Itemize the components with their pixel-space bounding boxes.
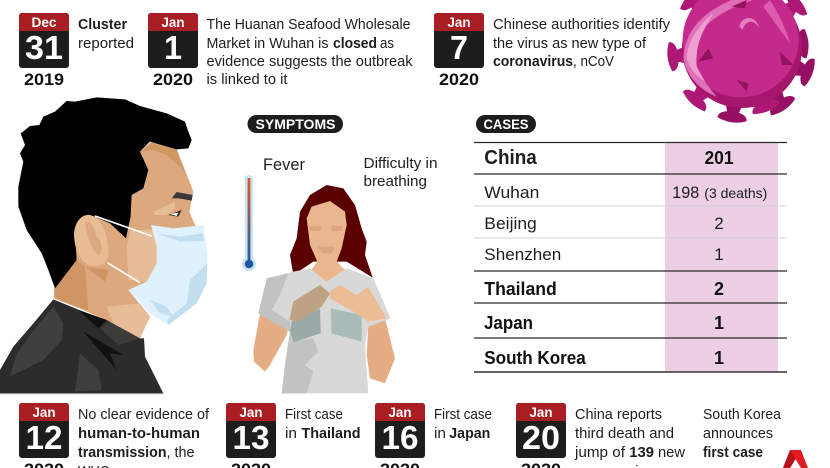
date: Jan 20 2020: 20	[522, 419, 560, 456]
text: first case Japan: in	[434, 426, 446, 442]
date: Jan 20 2020: Jan	[530, 404, 552, 420]
row: South Korea: South Korea	[484, 348, 587, 368]
text: first case Japan: Japan	[449, 426, 490, 442]
text: China third death	[574, 407, 688, 468]
row: Wuhan: 198	[672, 183, 699, 202]
text: cluster reported: Cluster	[78, 17, 127, 33]
text: first case Thailand: in	[285, 426, 297, 442]
text: virus identified: coronavirus	[493, 54, 573, 70]
row: Shenzhen	[484, 245, 724, 264]
text: no clear evidence: No clear evidence of	[78, 407, 210, 423]
date: Jan 1 2020: Jan	[162, 14, 184, 30]
text: South Korea first case: South Korea	[703, 407, 782, 423]
text: first case Japan	[434, 407, 492, 442]
label: difficulty in breathing: Difficulty in	[364, 156, 438, 172]
row: Beijing: Beijing	[484, 214, 537, 233]
row: South Korea	[484, 348, 724, 368]
text: China third death: 139	[629, 445, 654, 461]
date: Jan 20 2020	[516, 403, 566, 468]
row: Thailand: Thailand	[484, 279, 557, 299]
logo: red triangle	[783, 450, 808, 468]
text: market closed: Market in Wuhan is	[206, 36, 328, 52]
text: China third death: third death and	[575, 426, 674, 442]
text: no clear evidence: transmission	[78, 445, 166, 461]
row: China: 201	[704, 148, 734, 168]
cases heading: CASES	[484, 116, 528, 132]
text: no clear evidence: , the	[166, 445, 194, 461]
label: difficulty in breathing: breathing	[364, 174, 427, 190]
virus illustration	[666, 0, 817, 124]
text: market closed: as	[380, 36, 394, 52]
illustration: man wearing mask	[0, 97, 207, 394]
text: virus identified: , nCoV	[573, 54, 614, 70]
date: Jan 13 2020	[226, 403, 276, 468]
text: China third death: China reports	[575, 407, 662, 423]
date: Jan 7 2020: 2020	[439, 70, 479, 89]
text: market closed: closed	[333, 36, 377, 52]
date: Jan 13 2020: 13	[232, 419, 270, 456]
row: China: China	[484, 147, 538, 169]
text: market closed: is linked to it	[206, 72, 288, 88]
label: difficulty in breathing	[364, 156, 438, 190]
text: first case Thailand: Thailand	[302, 426, 360, 442]
row: Thailand	[484, 279, 724, 299]
text: no clear evidence: human-to-human	[78, 426, 200, 442]
symptoms heading: SYMPTOMS	[256, 116, 336, 132]
date: Jan 1 2020	[148, 13, 198, 89]
row: Japan	[484, 313, 724, 333]
row: Wuhan: Wuhan	[484, 183, 539, 202]
date: Jan 12 2020: Jan	[32, 404, 56, 420]
text: China third death: jump of	[574, 445, 626, 461]
text: first case Thailand: First case	[285, 407, 343, 423]
date: Dec 31 2019: 2019	[24, 70, 64, 89]
date: Dec 31 2019	[19, 13, 69, 89]
row: Shenzhen: Shenzhen	[484, 245, 561, 264]
row: Wuhan: (3 deaths)	[704, 185, 767, 201]
date: Jan 1 2020: 1	[164, 29, 182, 66]
text: no clear evidence	[78, 407, 210, 468]
date: Jan 12 2020: 12	[26, 419, 62, 456]
date: Jan 7 2020	[434, 13, 484, 89]
row: Thailand: 2	[714, 279, 724, 299]
text: first case Japan: First case	[434, 407, 492, 423]
date: Jan 1 2020: 2020	[153, 70, 193, 89]
date: Jan 16 2020	[375, 403, 425, 468]
text: South Korea first case: announces	[703, 426, 773, 442]
row: Beijing	[484, 214, 724, 233]
row: Beijing: 2	[714, 214, 724, 233]
illustration: woman with lungs	[253, 185, 395, 393]
text: cluster reported	[78, 17, 134, 52]
label: fever: Fever	[263, 155, 305, 174]
text: market closed: evidence suggests the outbreak	[206, 54, 413, 70]
text: virus identified	[493, 17, 671, 70]
row: South Korea: 1	[714, 348, 724, 368]
date: Jan 7 2020: Jan	[448, 14, 470, 30]
text: market closed	[206, 17, 413, 88]
icon: thermometer	[242, 175, 256, 271]
date: Jan 16 2020: 16	[382, 419, 418, 456]
date: Jan 12 2020	[19, 403, 69, 468]
row: Shenzhen: 1	[714, 245, 724, 264]
row: Japan: Japan	[484, 313, 533, 333]
table: cases by location	[474, 142, 787, 372]
date: Jan 16 2020: Jan	[388, 404, 412, 420]
row: Wuhan	[484, 183, 767, 202]
text: virus identified: Chinese authorities identify	[493, 17, 671, 33]
text: South Korea first case: first case	[703, 445, 763, 461]
row: China	[484, 147, 734, 169]
row: Japan: 1	[714, 313, 724, 333]
text: cluster reported: reported	[78, 36, 134, 52]
date: Jan 13 2020: Jan	[240, 404, 262, 420]
text: South Korea first case	[703, 407, 782, 461]
date: Dec 31 2019: Dec	[32, 14, 57, 30]
date: Dec 31 2019: 31	[25, 29, 63, 66]
date: Jan 7 2020: 7	[450, 29, 468, 66]
text: China third death: new	[658, 445, 686, 461]
text: first case Thailand	[285, 407, 360, 442]
text: virus identified: the virus as new type of	[493, 36, 647, 52]
text: market closed: The Huanan Seafood Wholesale	[206, 17, 410, 33]
